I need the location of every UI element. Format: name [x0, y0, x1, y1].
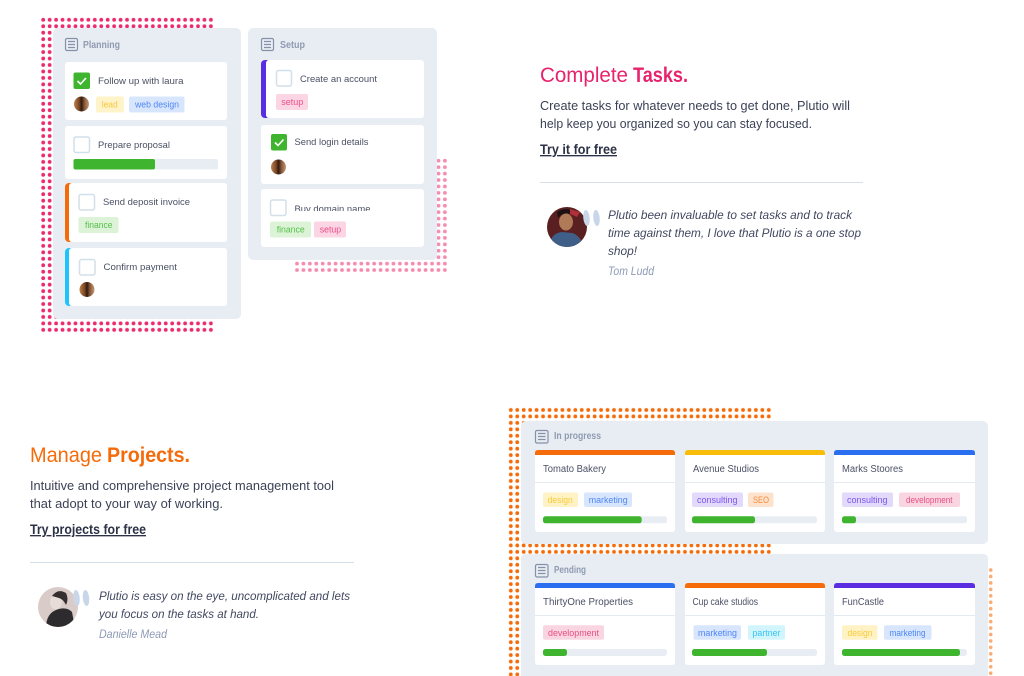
testimonial: danielle mead — [38, 587, 350, 641]
icon: pending list — [536, 564, 548, 577]
heading: setup: Setup — [280, 40, 305, 51]
testimonial: danielle mead: you focus on the tasks at hand. — [98, 607, 259, 621]
card: send login details — [261, 125, 424, 184]
card: send login details: Send login details — [294, 137, 369, 148]
card: send deposit invoice: Send deposit invoice — [103, 197, 190, 208]
card: marks stoores: consulting — [847, 495, 888, 505]
icon: setup list — [262, 38, 274, 50]
card: tomato bakery — [535, 450, 675, 532]
card: cup cake studios: Cup cake studios — [692, 597, 758, 608]
card: tomato bakery: Tomato Bakery — [543, 464, 606, 475]
card: buy domain name: Buy domain name — [294, 204, 370, 215]
text block: complete tasks — [540, 64, 850, 157]
heading: planning: Planning — [83, 40, 120, 51]
card: buy domain name: finance — [277, 224, 305, 234]
card: marks stoores: development — [906, 495, 953, 505]
testimonial: danielle mead: Danielle Mead — [99, 629, 168, 641]
icon: in progress list — [536, 430, 548, 443]
pink dotted frame: planning — [40, 17, 213, 333]
avatar: tom ludd — [547, 207, 587, 247]
panel: in progress — [521, 421, 988, 544]
panel: setup column — [248, 28, 437, 260]
card: funcastle — [834, 583, 975, 665]
card: follow up with laura: web design — [134, 100, 179, 110]
testimonial: tom ludd: Plutio been invaluable to set tasks and to track — [608, 208, 853, 222]
icon: planning list — [66, 38, 78, 50]
card: cup cake studios: partner — [752, 628, 780, 638]
card: tomato bakery: design — [548, 495, 573, 505]
card: follow up with laura — [65, 62, 227, 120]
light pink dotted frame: setup — [294, 158, 448, 273]
heading: pending: Pending — [554, 565, 586, 576]
icon: quote mark — [72, 590, 90, 606]
panel: planning column — [53, 28, 241, 319]
orange dotted frame — [508, 407, 773, 676]
avatar: danielle mead — [38, 587, 78, 628]
card: prepare proposal: Prepare proposal — [98, 140, 170, 151]
testimonial: tom ludd: shop! — [608, 244, 638, 258]
testimonial: tom ludd: Tom Ludd — [608, 266, 655, 278]
card: funcastle: marketing — [890, 628, 926, 638]
card: buy domain name: setup — [320, 224, 341, 234]
text block: complete tasks: Create tasks for whatever needs to get done, Plutio will — [540, 98, 850, 113]
card: marks stoores — [834, 450, 975, 532]
text block: complete tasks: Try it for free — [540, 142, 617, 157]
card: follow up with laura: Follow up with laura — [98, 76, 184, 87]
card: confirm payment: Confirm payment — [104, 262, 177, 273]
card: send deposit invoice: finance — [85, 220, 112, 230]
card: funcastle: design — [848, 628, 872, 638]
text block: manage projects — [30, 444, 334, 537]
icon: quote mark — [582, 210, 601, 226]
card: avenue studios: Avenue Studios — [693, 464, 759, 475]
text block: manage projects: Intuitive and comprehensive project management tool — [30, 478, 334, 493]
card: tomato bakery: marketing — [589, 495, 628, 505]
card: thirtyone properties: development — [548, 628, 599, 638]
light orange dotted column — [988, 567, 994, 676]
card: prepare proposal — [65, 126, 227, 179]
testimonial: danielle mead: Plutio is easy on the eye, uncomplicated and lets — [99, 589, 350, 603]
text block: manage projects: Try projects for free — [30, 522, 146, 537]
heading: manage projects: Manage — [30, 444, 102, 467]
card: buy domain name — [261, 189, 424, 247]
card: cup cake studios — [685, 583, 825, 665]
panel: pending — [521, 554, 988, 676]
heading: manage projects: Projects. — [107, 444, 190, 467]
card: avenue studios — [685, 450, 825, 532]
card: create an account: Create an account — [300, 74, 377, 85]
heading: complete tasks: Tasks. — [633, 64, 688, 87]
card: create an account — [261, 60, 424, 118]
card: thirtyone properties — [535, 583, 675, 665]
text block: complete tasks: help keep you organized so you can stay focused. — [540, 116, 812, 131]
card: thirtyone properties: ThirtyOne Properties — [543, 597, 633, 608]
card: avenue studios: SEO — [753, 495, 769, 505]
card: marks stoores: Marks Stoores — [842, 464, 903, 475]
heading: in progress: In progress — [554, 431, 601, 442]
card: avenue studios: consulting — [697, 495, 738, 505]
text block: manage projects: that adopt to your way of working. — [30, 496, 223, 511]
card: send deposit invoice — [65, 183, 227, 242]
testimonial: tom ludd: time against them, I love that Plutio is a one stop — [608, 226, 861, 240]
card: confirm payment — [65, 248, 227, 306]
card: create an account: setup — [281, 97, 303, 107]
card: follow up with laura: lead — [102, 100, 118, 110]
testimonial: tom ludd — [547, 207, 861, 278]
card: cup cake studios: marketing — [698, 628, 737, 638]
heading: complete tasks: Complete — [540, 64, 628, 87]
card: funcastle: FunCastle — [842, 597, 884, 608]
